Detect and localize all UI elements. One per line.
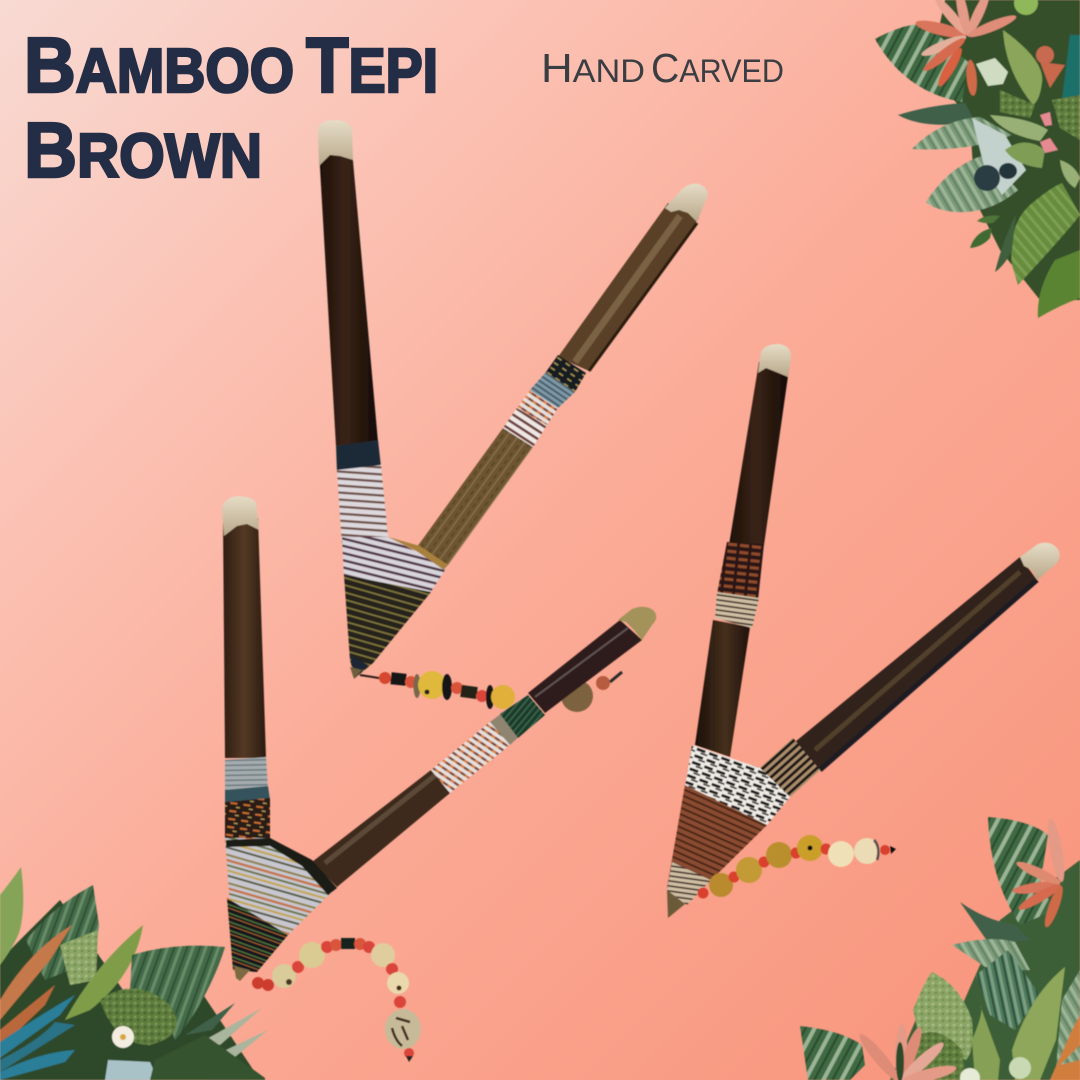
foliage: bottom right <box>800 817 1080 1080</box>
top flower petals <box>914 0 1018 96</box>
A junction wrap <box>342 537 447 679</box>
B junction wrap <box>225 838 337 981</box>
A tip right <box>665 184 708 222</box>
C junction wrap <box>667 745 790 918</box>
C branch wrap <box>760 738 820 797</box>
A left tube <box>319 150 378 446</box>
B branch wrap <box>431 695 545 793</box>
B neck wrap <box>225 757 270 843</box>
foliage: top right <box>875 0 1080 318</box>
title <box>24 11 438 196</box>
title: Brown <box>24 96 262 196</box>
foliage: bottom left <box>0 867 268 1080</box>
C bead string <box>698 835 896 898</box>
B bead behind <box>561 672 622 712</box>
title: Tepi <box>306 11 438 111</box>
B bead string <box>252 938 421 1062</box>
B tip left <box>222 496 259 536</box>
B tip right <box>618 607 656 640</box>
tepi A: top centre pipe <box>318 120 708 709</box>
C upper left tube <box>729 362 790 545</box>
title: Bamboo <box>24 11 294 111</box>
subtitle <box>541 40 784 92</box>
B left tube <box>223 518 266 758</box>
A neck wrap <box>336 440 388 545</box>
C long right tube <box>795 557 1037 770</box>
A lower right bark <box>417 428 533 565</box>
bottom flower petals <box>856 1024 958 1080</box>
subtitle: Hand <box>541 40 645 92</box>
right flower petals <box>1012 818 1068 929</box>
C tip left <box>758 344 791 377</box>
C neck wrap <box>715 542 764 628</box>
A branch wrap <box>503 355 586 447</box>
C lower left tube <box>695 620 750 757</box>
A tip left <box>318 120 353 166</box>
C tip right <box>1020 543 1060 580</box>
B upper tube <box>528 620 642 713</box>
A upper tube <box>558 203 699 371</box>
B lower right tube <box>312 770 450 887</box>
A bead string <box>360 671 515 709</box>
tepi C: right pipe <box>667 344 1060 918</box>
tepi B: bottom left pipe <box>222 496 656 1062</box>
subtitle: Carved <box>651 40 784 92</box>
